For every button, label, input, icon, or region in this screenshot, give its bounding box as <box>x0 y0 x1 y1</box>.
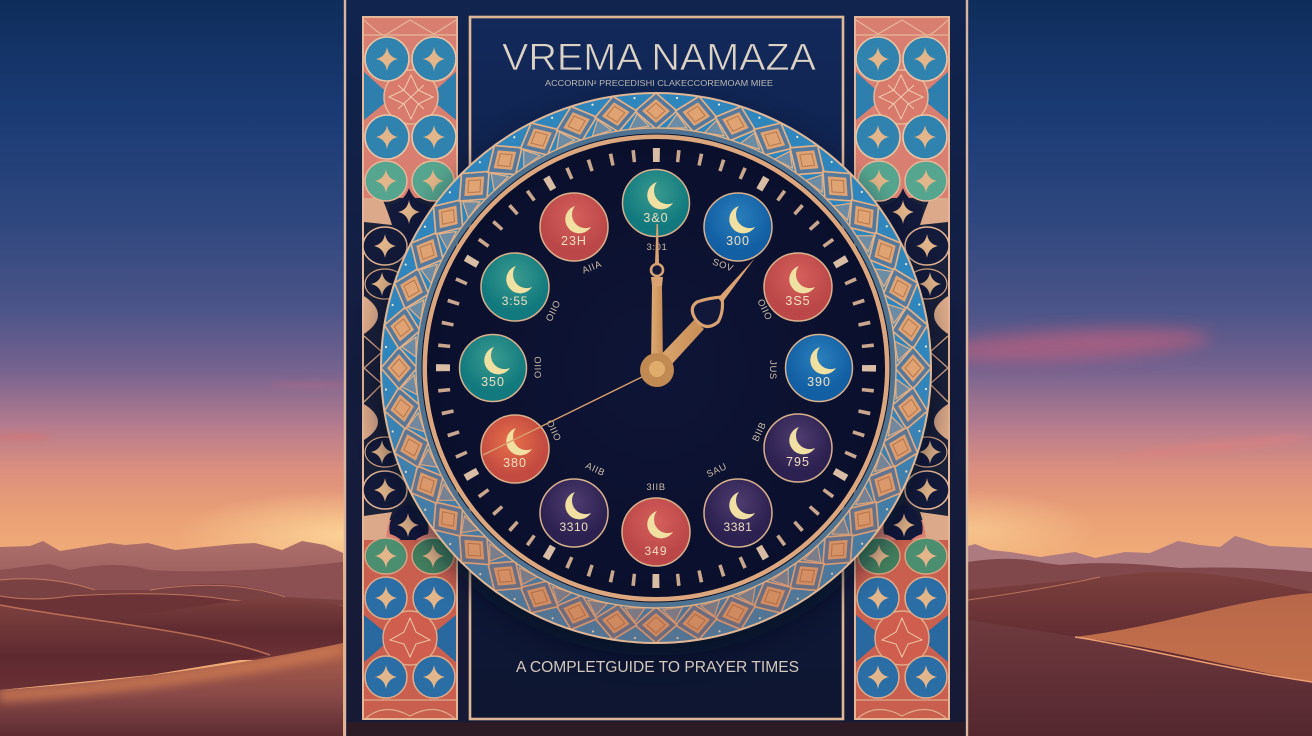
prayer disc 11: 3:55 <box>502 294 528 308</box>
prayer disc 10 <box>460 334 526 402</box>
poster backing <box>345 0 967 736</box>
radial small labels: SAU <box>705 461 729 480</box>
prayer disc 9 <box>481 415 549 483</box>
radial small labels <box>533 242 778 493</box>
second hand <box>483 373 650 455</box>
clock shadow <box>380 104 932 656</box>
tagline: A COMPLETGUIDE TO PRAYER TIMES <box>516 659 799 676</box>
prayer disc 7: 349 <box>644 544 668 558</box>
hour ticks <box>443 155 869 581</box>
radial small labels: OIIO <box>533 356 544 378</box>
prayer disc 8 <box>540 479 608 547</box>
prayer disc 6: 3381 <box>723 520 753 534</box>
prayer disc 8: 3310 <box>559 520 589 534</box>
prayer disc 3 <box>764 253 832 321</box>
prayer disc 12: 23H <box>561 234 587 248</box>
ornamental clock ring <box>380 92 932 644</box>
radial small labels: 3IIB <box>646 482 666 493</box>
title: VREMA NAMAZA <box>502 37 817 79</box>
prayer disc 9: 380 <box>503 456 527 470</box>
clock hub <box>640 353 674 387</box>
radial small labels: OIIO <box>544 418 563 443</box>
prayer disc 3: 3S5 <box>785 294 811 308</box>
prayer disc 2: 300 <box>726 234 750 248</box>
decorative side panel left <box>363 17 457 719</box>
desert dunes right <box>968 536 1312 736</box>
subtitle: ACCORDIN² PRECEDISHI CLAKECCOREMOAM MIEE <box>545 79 773 88</box>
prayer disc 4 <box>786 334 852 402</box>
radial small labels: AIIB <box>584 460 607 479</box>
central title panel <box>470 17 843 719</box>
radial small labels: SOV <box>711 257 735 275</box>
radial small labels: OIIO <box>544 298 563 323</box>
prayer disc 12 <box>540 193 608 261</box>
prayer disc 10: 350 <box>481 375 505 389</box>
minute hand <box>651 224 663 368</box>
minute ticks <box>443 155 869 581</box>
radial small labels: 3:01 <box>647 242 667 253</box>
prayer disc 6 <box>704 479 772 547</box>
radial small labels: AIIA <box>581 259 604 277</box>
prayer disc 5: 795 <box>786 455 810 469</box>
decorative side panel right <box>855 17 949 719</box>
prayer disc 1 <box>622 170 690 236</box>
prayer disc 4: 390 <box>807 375 831 389</box>
prayer disc 5 <box>764 414 832 482</box>
desert dunes left <box>0 541 343 736</box>
prayer disc 11 <box>481 253 549 321</box>
prayer disc 1: 3&0 <box>643 211 669 225</box>
radial small labels: OIIO <box>755 297 774 322</box>
hour hand <box>651 258 755 375</box>
radial small labels: BIIB <box>750 420 769 443</box>
prayer disc 2 <box>704 193 772 261</box>
clock dial <box>427 139 885 597</box>
prayer disc 7 <box>622 498 690 566</box>
radial small labels: JUS <box>767 360 778 380</box>
